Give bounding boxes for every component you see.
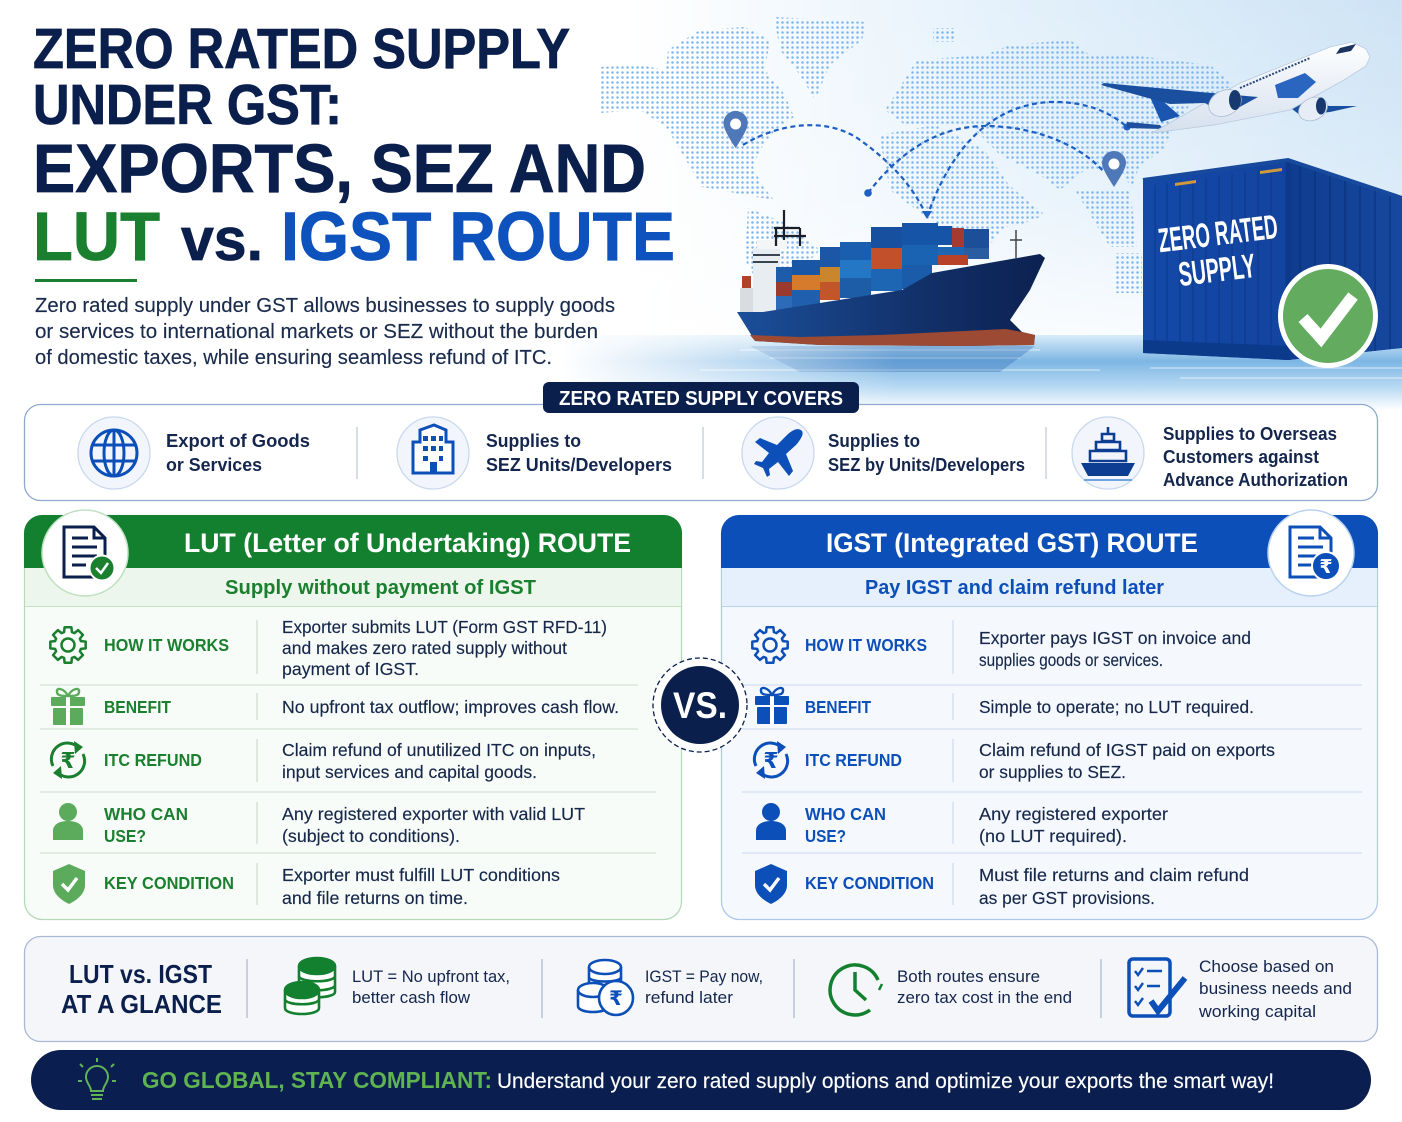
IGST row: how it works (752, 627, 1251, 670)
title: UNDER GST: (33, 73, 342, 137)
glance item: clock (830, 965, 1072, 1015)
badge: ZERO RATED SUPPLY COVERS (559, 388, 843, 410)
cover item: export: Export of Goods (166, 430, 310, 451)
shipping container (1143, 160, 1402, 360)
IGST row: ITC refund: or supplies to SEZ. (979, 762, 1126, 782)
cargo ship (737, 210, 1045, 346)
container label: SUPPLY (1176, 247, 1258, 294)
panel: at a glance (24, 936, 1378, 1042)
LUT sub header: Supply without payment of IGST (225, 577, 536, 599)
background (0, 0, 1402, 400)
cover item: advance authorization: Customers against (1163, 446, 1319, 467)
title underline (35, 279, 137, 282)
container stacks (776, 223, 989, 312)
LUT row: how it works: HOW IT WORKS (104, 635, 229, 655)
glance item: LUT (285, 958, 510, 1014)
LUT sub header (25, 568, 681, 606)
intro paragraph (35, 295, 615, 369)
banner (31, 1050, 1371, 1110)
glance item: clock: Both routes ensure (897, 968, 1040, 986)
route arcs (743, 102, 1127, 217)
cover item: SEZ by units (742, 417, 1025, 489)
IGST header (721, 515, 1378, 568)
LUT row: who can use: Any registered exporter with valid LUT (282, 804, 585, 824)
container label (1156, 208, 1284, 296)
LUT row: key condition: Exporter must fulfill LUT conditions (282, 865, 560, 885)
LUT row: how it works: and makes zero rated supply without (282, 638, 567, 658)
LUT row: who can use: WHO CAN (104, 804, 188, 824)
LUT row: ITC refund: input services and capital goods. (282, 762, 537, 782)
badge (543, 382, 859, 413)
IGST row: key condition: as per GST provisions. (979, 888, 1155, 908)
IGST row: who can use: Any registered exporter (979, 804, 1168, 824)
title: EXPORTS, SEZ AND (33, 130, 646, 207)
intro paragraph: or services to international markets or SEZ without the burden (35, 321, 598, 343)
title (33, 17, 675, 275)
panel: LUT route (24, 510, 682, 920)
IGST row: ITC refund (754, 740, 1275, 782)
title: vs. (181, 206, 263, 273)
glance item: LUT: LUT = No upfront tax, (352, 968, 510, 986)
LUT header: LUT (Letter of Undertaking) ROUTE (184, 528, 631, 558)
check badge (1278, 264, 1378, 368)
container label: ZERO RATED (1156, 208, 1280, 260)
icon: LUT document (42, 510, 128, 596)
IGST row: how it works: Exporter pays IGST on invoice and (979, 628, 1251, 648)
glance item: IGST: IGST = Pay now, (645, 968, 763, 986)
IGST sub header (722, 568, 1377, 606)
panel: zero rated supply covers (24, 382, 1378, 500)
intro paragraph: of domestic taxes, while ensuring seamless refund of ITC. (35, 347, 552, 369)
LUT row: who can use: (subject to conditions). (282, 826, 460, 846)
airplane (1101, 42, 1370, 133)
superstructure (740, 210, 806, 312)
LUT row: key condition: and file returns on time. (282, 888, 468, 908)
icon: map pin left (724, 111, 748, 148)
glance item: IGST: refund later (645, 989, 734, 1007)
icon: light bulb (78, 1058, 116, 1099)
banner: Understand your zero rated supply options and optimize your exports the smart way! (497, 1070, 1274, 1093)
cover item: SEZ by units: Supplies to (828, 430, 920, 451)
glance item: checklist (1129, 958, 1352, 1021)
LUT row: how it works (50, 617, 607, 679)
IGST header: IGST (Integrated GST) ROUTE (826, 528, 1198, 558)
IGST row: benefit: BENEFIT (805, 697, 871, 717)
IGST row: key condition: Must file returns and claim refund (979, 865, 1249, 885)
icon: map pin right (1102, 151, 1126, 187)
IGST row: who can use: USE? (805, 826, 846, 846)
LUT row: key condition: KEY CONDITION (104, 873, 234, 893)
LUT row: benefit: BENEFIT (104, 697, 171, 717)
title: LUT (33, 198, 160, 275)
LUT header (24, 515, 682, 568)
glance item: checklist: working capital (1198, 1003, 1316, 1021)
glance item: LUT: better cash flow (352, 989, 470, 1007)
IGST row: who can use: WHO CAN (805, 804, 886, 824)
cover item: advance authorization: Supplies to Overseas (1163, 423, 1337, 444)
cover item: SEZ units: SEZ Units/Developers (486, 454, 672, 475)
hull (737, 254, 1045, 346)
LUT row: ITC refund (51, 740, 596, 782)
IGST row: how it works: HOW IT WORKS (805, 635, 927, 655)
LUT row: ITC refund: ITC REFUND (104, 750, 202, 770)
LUT row: who can use: USE? (104, 826, 146, 846)
IGST row: how it works: supplies goods or services. (979, 650, 1163, 670)
VS badge: VS. (673, 685, 727, 726)
IGST row: ITC refund: Claim refund of IGST paid on exports (979, 740, 1275, 760)
LUT row: who can use (53, 803, 585, 846)
title: IGST ROUTE (281, 198, 675, 275)
banner text: GO GLOBAL, STAY COMPLIANT: (142, 1067, 492, 1093)
IGST row: key condition: KEY CONDITION (805, 873, 934, 893)
glance heading (61, 959, 222, 1019)
IGST row: benefit (755, 688, 1254, 724)
glance item: checklist: business needs and (1199, 980, 1352, 998)
panel: IGST route (721, 510, 1378, 920)
cover item: advance authorization: Advance Authorization (1163, 469, 1348, 490)
cover item: export: or Services (166, 454, 262, 475)
IGST row: who can use (756, 803, 1168, 846)
LUT row: benefit: No upfront tax outflow; improves cash flow. (282, 697, 619, 717)
LUT row: key condition (53, 864, 560, 908)
sea (560, 335, 1402, 410)
IGST row: who can use: (no LUT required). (979, 826, 1127, 846)
LUT row: how it works: Exporter submits LUT (Form GST RFD-11) (282, 617, 607, 637)
title: ZERO RATED SUPPLY (33, 17, 570, 81)
cover item: SEZ by units: SEZ by Units/Developers (828, 454, 1025, 475)
IGST row: ITC refund: ITC REFUND (805, 750, 902, 770)
cover item: SEZ units: Supplies to (486, 430, 581, 451)
glance item: IGST: ₹ (609, 986, 623, 1010)
icon: IGST document: ₹ (1319, 556, 1333, 578)
cover item: SEZ units (397, 417, 672, 489)
cover item: advance authorization (1072, 417, 1348, 490)
IGST row: key condition (755, 864, 1249, 908)
cover item: export (78, 417, 310, 489)
VS badge (653, 658, 747, 752)
LUT row: ITC refund: Claim refund of unutilized ITC on inputs, (282, 740, 596, 760)
route nodes (864, 123, 1131, 219)
glance item: clock: zero tax cost in the end (897, 989, 1072, 1007)
glance heading: LUT vs. IGST (69, 959, 212, 989)
glance item: checklist: Choose based on (1199, 958, 1334, 976)
LUT row: benefit (51, 689, 619, 725)
LUT row: how it works: payment of IGST. (282, 659, 419, 679)
world map dotted (600, 17, 1234, 300)
glance heading: AT A GLANCE (61, 989, 222, 1019)
IGST row: benefit: Simple to operate; no LUT required. (979, 697, 1254, 717)
glance item: IGST (578, 960, 763, 1015)
icon: IGST document (1268, 510, 1354, 596)
intro paragraph: Zero rated supply under GST allows businesses to supply goods (35, 295, 615, 317)
IGST sub header: Pay IGST and claim refund later (865, 577, 1164, 599)
